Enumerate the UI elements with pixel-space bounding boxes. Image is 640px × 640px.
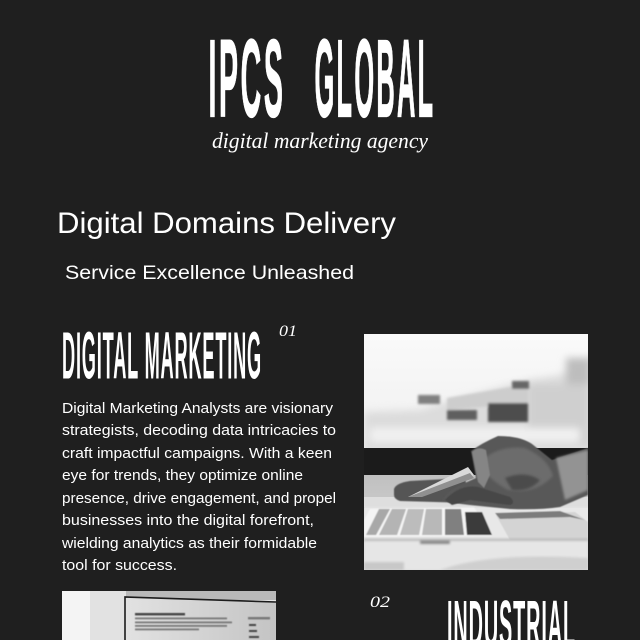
text block: digital marketing description: tool for success. — [62, 558, 177, 574]
text block: digital marketing description: strategists, decoding data intricacies to — [62, 423, 336, 439]
title: IPCS GLOBAL: IPCS — [208, 18, 286, 140]
text block: digital marketing description — [61, 401, 336, 574]
text block: digital marketing description: presence, drive engagement, and propel — [62, 491, 336, 507]
text block: digital marketing description: wielding analytics as their formidable — [61, 536, 317, 552]
text block: digital marketing description: businesses into the digital forefront, — [62, 513, 314, 529]
photo: laptop keyboard — [364, 507, 590, 540]
section number 01: 01 — [279, 323, 297, 340]
subheading: Service Excellence Unleashed: Service Excellence Unleashed — [65, 262, 354, 284]
text block: digital marketing description: eye for trends, they optimize online — [62, 468, 303, 484]
text block: digital marketing description: craft impactful campaigns. With a keen — [62, 446, 332, 462]
photo: dark window ledge — [364, 448, 588, 460]
heading: Digital Domains Delivery: Digital Domains Delivery — [57, 207, 396, 240]
photo: hand with pen over laptop — [364, 334, 600, 570]
photo: dark tablet under pen — [394, 478, 470, 503]
photo: monitor with article on screen — [62, 591, 276, 640]
photo: blurred article text lines — [135, 613, 270, 638]
subtitle: digital marketing agency: digital marketing agency — [212, 128, 428, 153]
photo: hand holding pen — [408, 436, 588, 509]
photo: desk foreground — [364, 539, 588, 570]
text block: digital marketing description: Digital Marketing Analysts are visionary — [62, 401, 334, 417]
section number 02: 02 — [370, 594, 390, 611]
